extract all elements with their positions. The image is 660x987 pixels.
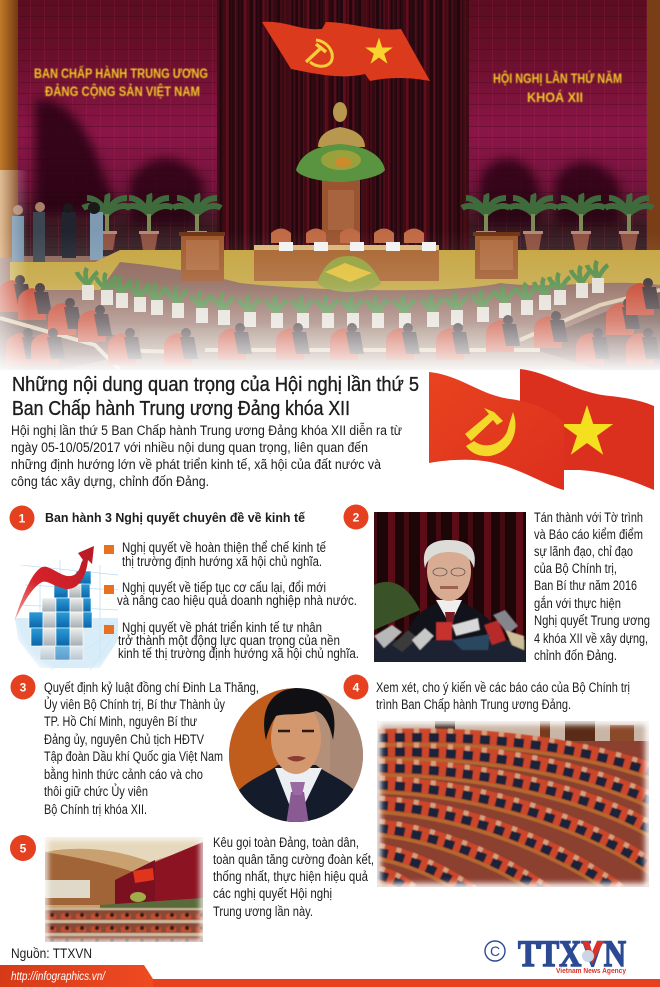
centre curtain bbox=[217, 0, 469, 254]
item 3 text: Ủy viên Bộ Chính trị, Bí thư Thành ủy bbox=[44, 697, 225, 712]
number badge 2 bbox=[344, 504, 368, 530]
bullet: Nghị quyết 2: và nâng cao hiệu quả doanh nghiệp nhà nước. bbox=[117, 593, 357, 608]
logo: TTXVN bbox=[485, 934, 627, 975]
left banner panel bbox=[18, 0, 218, 256]
number badge 3: 3 bbox=[20, 680, 27, 694]
podiums and presidium table bbox=[179, 228, 520, 292]
bullet: Nghị quyết 1: thị trường định hướng xã hội chủ nghĩa. bbox=[122, 554, 322, 569]
banner text right bbox=[493, 71, 622, 105]
number badge 1 bbox=[10, 506, 34, 530]
item 3 text: Quyết định kỷ luật đồng chí Đinh La Thăng, bbox=[44, 680, 259, 695]
item 1 bbox=[8, 506, 359, 675]
intro text bbox=[11, 423, 402, 489]
bust and flower stand bbox=[296, 102, 385, 250]
bullet: Nghị quyết 3: Nghị quyết về phát triển kinh tế tư nhân bbox=[122, 620, 322, 635]
banner text right: HỘI NGHỊ LẦN THỨ NĂM bbox=[493, 71, 622, 86]
item 3 text bbox=[44, 680, 259, 817]
potted palms on stage bbox=[83, 194, 653, 250]
number badge 2: 2 bbox=[353, 510, 360, 524]
bullet: Nghị quyết 3: trở thành một động lực quan trọng của nền bbox=[118, 633, 340, 648]
hero photo: conference hall stage bbox=[0, 0, 660, 372]
title bbox=[12, 374, 419, 420]
icon: national flag with star bbox=[520, 369, 654, 490]
footer bar with URL bbox=[0, 965, 660, 987]
delegates seating bbox=[0, 275, 660, 370]
item 5 bbox=[10, 835, 374, 942]
photo: portrait in circle bbox=[229, 688, 363, 825]
photo: delegates voting bbox=[377, 721, 649, 887]
item 4 text: trình Ban Chấp hành Trung ương Đảng. bbox=[376, 697, 571, 712]
banner text left: ĐẢNG CỘNG SẢN VIỆT NAM bbox=[45, 84, 200, 99]
item 5 text: thống nhất, thực hiện hiệu quả bbox=[213, 869, 368, 884]
photographers bbox=[12, 202, 103, 264]
bullet: Nghị quyết 2: Nghị quyết về tiếp tục cơ cấu lại, đổi mới bbox=[122, 580, 326, 595]
item 3 text: Tập đoàn Dầu khí Quốc gia Việt Nam bbox=[44, 749, 223, 764]
right banner panel bbox=[467, 0, 647, 256]
item 2 text: của Bộ Chính trị, bbox=[534, 561, 617, 576]
logo: TTXVN: C bbox=[490, 943, 500, 959]
banner text left bbox=[34, 66, 208, 99]
bullet: Nghị quyết 3: kinh tế thị trường định hướng xã hội chủ nghĩa. bbox=[118, 646, 359, 661]
photo: speaker at microphones bbox=[374, 512, 526, 662]
large party and national flags bbox=[429, 369, 654, 490]
icon: party flag with hammer and sickle bbox=[429, 372, 564, 490]
item 2 text bbox=[534, 510, 650, 663]
number badge 5 bbox=[10, 835, 36, 861]
source credit: Nguồn: TTXVN bbox=[11, 945, 92, 961]
item 5 text: các nghị quyết Hội nghị bbox=[213, 886, 332, 901]
row of white-potted plants bbox=[77, 261, 608, 328]
item 3 text: thôi giữ chức Ủy viên bbox=[44, 784, 148, 799]
number badge 5: 5 bbox=[20, 842, 27, 856]
item 3 text: TP. Hồ Chí Minh, nguyên Bí thư bbox=[44, 714, 197, 729]
number badge 4: 4 bbox=[353, 680, 360, 694]
item 3 text: Bộ Chính trị khóa XII. bbox=[44, 802, 147, 817]
item 5 text: toàn quân tăng cường đoàn kết, bbox=[213, 852, 374, 867]
number badge 1: 1 bbox=[19, 512, 26, 526]
soft white photo edge bbox=[377, 721, 649, 887]
banner text left: BAN CHẤP HÀNH TRUNG ƯƠNG bbox=[34, 66, 208, 81]
soft white photo edge bbox=[45, 837, 203, 942]
intro text: những định hướng lớn về phát triển kinh tế, xã hội của đất nước và bbox=[11, 457, 381, 472]
logo: TTXVN: Vietnam News Agency bbox=[556, 966, 627, 975]
intro text: công tác xây dựng, chỉnh đốn Đảng. bbox=[11, 474, 209, 489]
bullet: Nghị quyết 3 bbox=[104, 620, 359, 661]
chart illustration: cubes and rising arrow bbox=[8, 540, 124, 675]
bullet: Nghị quyết 2 bbox=[104, 580, 357, 608]
photo: wide hall view bbox=[45, 837, 203, 942]
bullet: Nghị quyết 1 bbox=[104, 540, 326, 569]
item 4 bbox=[344, 674, 649, 887]
item 3 bbox=[10, 674, 363, 825]
item 3 text: bằng hình thức cảnh cáo và cho bbox=[44, 767, 203, 782]
number badge 4 bbox=[344, 674, 368, 700]
item 2 text: sự lãnh đạo, chỉ đạo bbox=[534, 544, 633, 559]
item 2 text: chỉnh đốn Đảng. bbox=[534, 648, 617, 663]
item 2 text: gắn với thực hiện bbox=[534, 596, 621, 611]
bullet: Nghị quyết 1: Nghị quyết về hoàn thiện thể chế kinh tế bbox=[122, 540, 326, 555]
intro text: Hội nghị lần thứ 5 Ban Chấp hành Trung ương Đảng khóa XII diễn ra từ bbox=[11, 423, 402, 438]
item 5 text: Trung ương lần này. bbox=[213, 904, 313, 919]
item 3 text: Đảng ủy, nguyên Chủ tịch HĐTV bbox=[44, 732, 204, 747]
intro text: ngày 05-10/05/2017 với nhiều nội dung quan trọng, liên quan đến bbox=[11, 440, 368, 455]
banner text right: KHOÁ XII bbox=[527, 90, 583, 105]
item 1 heading: Ban hành 3 Nghị quyết chuyên đề về kinh tế bbox=[45, 510, 306, 525]
item 5 text: Kêu gọi toàn Đảng, toàn dân, bbox=[213, 835, 359, 850]
item 4 text bbox=[376, 680, 630, 712]
white fade overlays bbox=[0, 0, 660, 372]
item 2 text: Ban Bí thư năm 2016 bbox=[534, 578, 637, 593]
stage flag bbox=[262, 22, 430, 81]
item 2 bbox=[344, 504, 650, 663]
number badge 3 bbox=[10, 674, 36, 700]
stage floor bbox=[10, 250, 660, 290]
footer bar with URL: http://infographics.vn/ bbox=[11, 971, 107, 983]
item 5 text bbox=[213, 835, 374, 919]
title: Ban Chấp hành Trung ương Đảng khóa XII bbox=[12, 398, 350, 420]
logo: TTXVN: TTXVN bbox=[518, 934, 626, 975]
title: Những nội dung quan trọng của Hội nghị lần thứ 5 bbox=[12, 374, 419, 396]
